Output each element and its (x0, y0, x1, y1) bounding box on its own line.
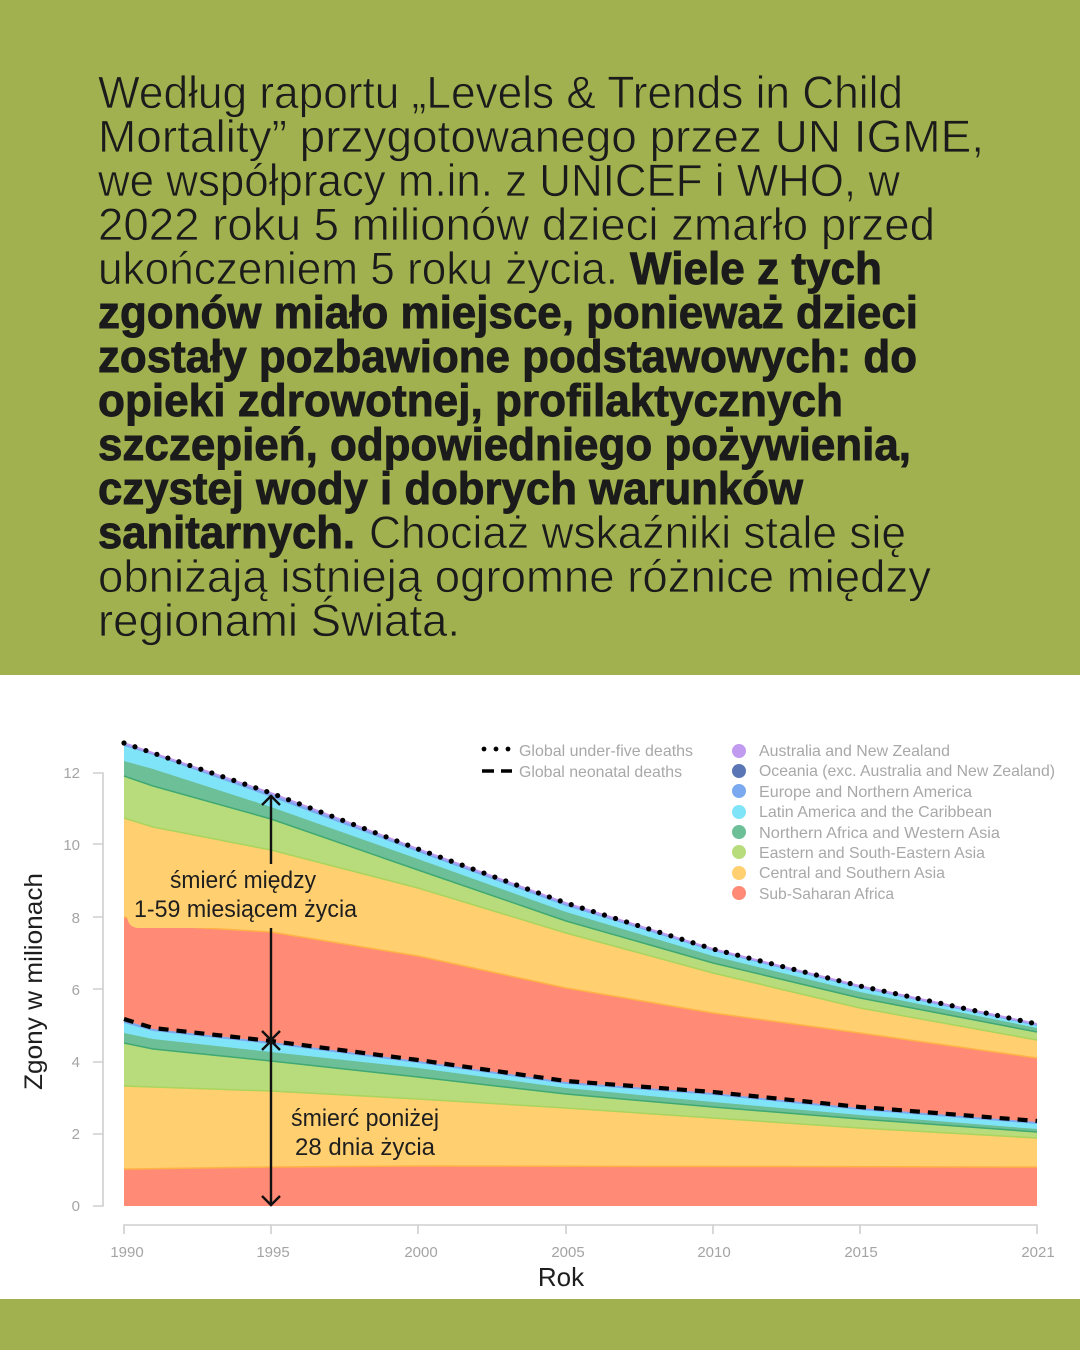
legend: regions: Latin America and the Caribbean (759, 804, 992, 821)
label: under 28 days: śmierć poniżej (291, 1105, 439, 1132)
intro paragraph: czystej wody i dobrych warunków (98, 463, 804, 514)
legend: regions: Australia and New Zealand (759, 743, 950, 760)
intro paragraph: sanitarnych. (98, 507, 355, 558)
y axis: 2 (72, 1126, 80, 1143)
x axis: 1990 (110, 1244, 144, 1261)
legend: regions: Sub-Saharan Africa (759, 886, 894, 903)
label: under 28 days (291, 1105, 439, 1161)
y axis: 4 (72, 1054, 80, 1071)
intro paragraph: regionami Świata. (98, 595, 460, 646)
label: 1-59 months: 1-59 miesiącem życia (134, 896, 358, 923)
intro paragraph: we współpracy m.in. z UNICEF i WHO, w (97, 155, 900, 206)
legend: regions: Northern Africa and Western Asia (759, 825, 1000, 842)
y axis: 10 (63, 837, 80, 854)
label: 1-59 months: śmierć między (170, 867, 316, 894)
intro paragraph: Mortality” przygotowanego przez UN IGME, (98, 111, 984, 162)
legend: global lines: Global neonatal deaths (519, 764, 682, 781)
x axis: 2000 (404, 1244, 438, 1261)
intro paragraph: Wiele z tych (630, 243, 882, 294)
y axis: 6 (72, 982, 80, 999)
y axis: 12 (63, 765, 80, 782)
legend: regions: Oceania (exc. Australia and New Zealand) (759, 763, 1055, 780)
intro paragraph: Według raportu „Levels & Trends in Child (98, 67, 903, 118)
label: under 28 days: 28 dnia życia (295, 1134, 436, 1161)
intro paragraph: szczepień, odpowiedniego pożywienia, (98, 419, 911, 470)
legend: regions: Central and Southern Asia (759, 865, 945, 882)
x axis (110, 1225, 1055, 1261)
arrow: 1-59 months (262, 795, 280, 1040)
intro paragraph (97, 67, 984, 646)
x axis: 2010 (697, 1244, 731, 1261)
intro paragraph: 2022 roku 5 milionów dzieci zmarło przed (98, 199, 935, 250)
label: 1-59 months (134, 867, 358, 923)
x axis title: Rok (538, 1262, 585, 1292)
intro paragraph: opieki zdrowotnej, profilaktycznych (98, 375, 843, 426)
legend: regions (732, 743, 1055, 903)
x axis: 1995 (256, 1244, 290, 1261)
legend: global lines: Global under-five deaths (519, 743, 693, 760)
intro paragraph: zgonów miało miejsce, ponieważ dzieci (98, 287, 918, 338)
legend: regions: Europe and Northern America (759, 784, 972, 801)
y axis (63, 765, 103, 1215)
y axis: 8 (72, 910, 80, 927)
panel: white chart background (0, 675, 1080, 1299)
chart: stacked area of deaths by region (124, 742, 1037, 1206)
label background: 1-59 months (127, 866, 368, 928)
legend: global lines (482, 743, 693, 781)
global neonatal deaths dashed line (124, 1019, 1037, 1121)
intro paragraph: ukończeniem 5 roku życia. (98, 243, 618, 294)
arrow: under 28 days (262, 1041, 280, 1205)
x axis: 2021 (1021, 1244, 1055, 1261)
global under-five deaths dotted line (124, 743, 1037, 1024)
intro paragraph: obniżają istnieją ogromne różnice między (98, 551, 932, 602)
x axis: 2005 (551, 1244, 585, 1261)
x axis: 2015 (844, 1244, 878, 1261)
y axis title: Zgony w milionach (20, 873, 48, 1090)
y axis: 0 (72, 1198, 80, 1215)
intro paragraph: zostały pozbawione podstawowych: do (98, 331, 917, 382)
legend: regions: Eastern and South-Eastern Asia (759, 845, 985, 862)
intro paragraph: Chociaż wskaźniki stale się (369, 507, 906, 558)
